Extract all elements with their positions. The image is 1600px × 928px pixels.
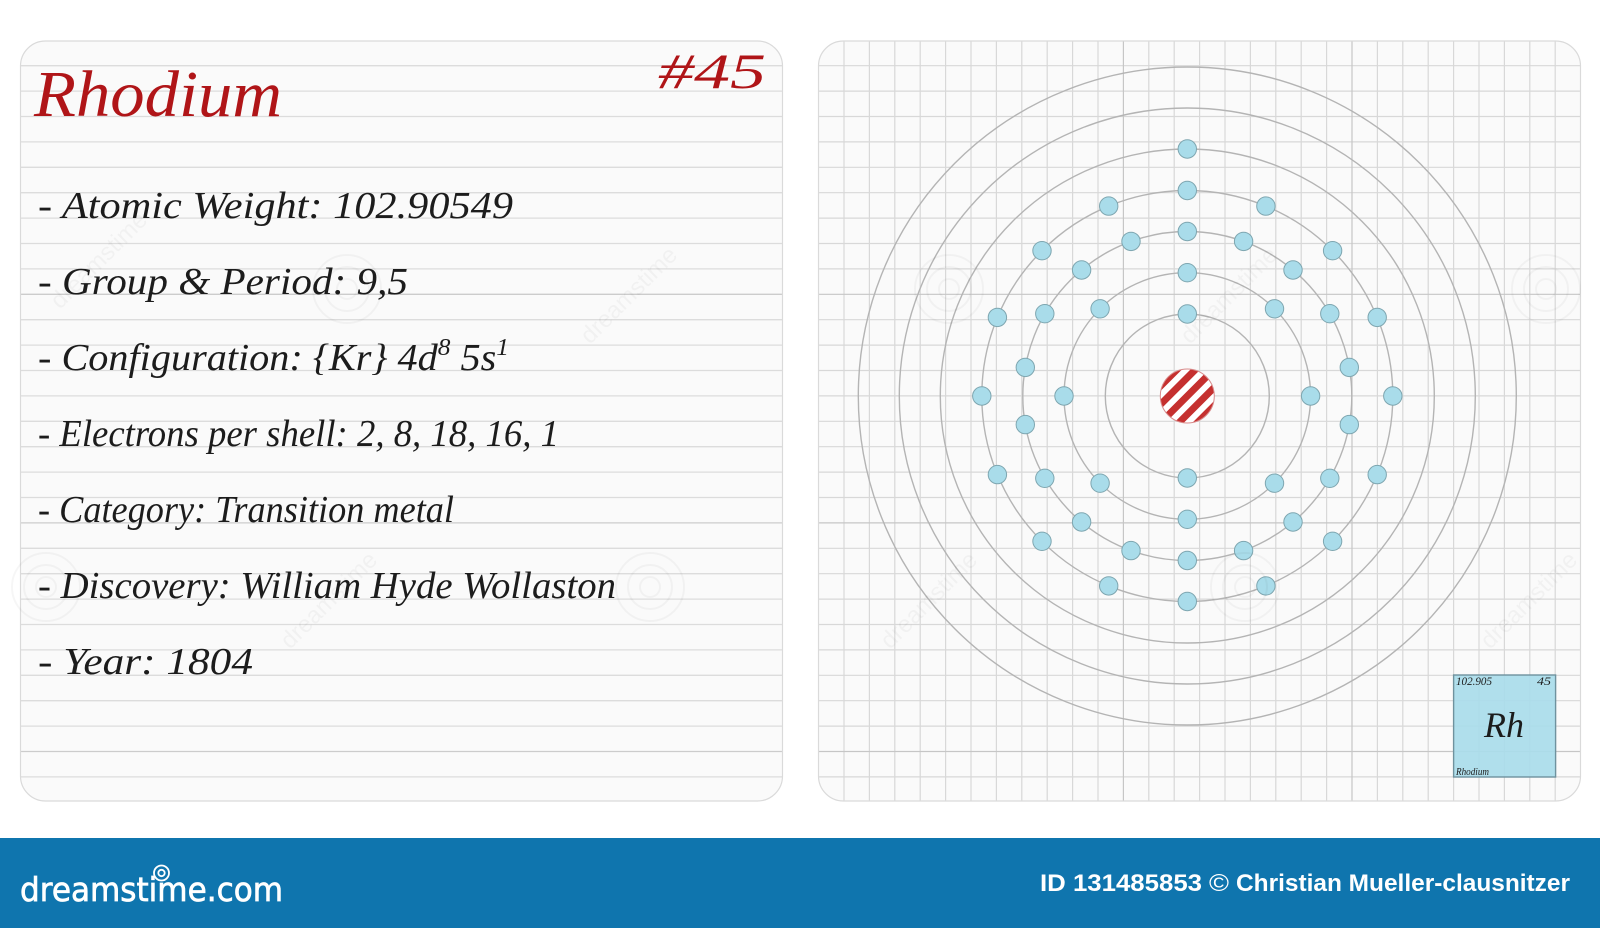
fact: electrons per shell: - Electrons per shell: 2, 8, 18, 16, 1 [38, 413, 559, 455]
image credit: ID 131485853 [1040, 870, 1202, 897]
tile symbol: Rh [1483, 705, 1524, 745]
atom shells [858, 67, 1516, 725]
fact: configuration: 1 [496, 335, 509, 361]
fact: category: - Category: Transition metal [38, 489, 454, 531]
watermarks [12, 206, 1583, 654]
tile name: Rhodium [1455, 766, 1489, 778]
shell 2 electrons [1055, 264, 1320, 528]
fact: year: - Year: 1804 [38, 641, 253, 683]
shell 5 electron [1178, 140, 1196, 158]
watermarks: dreamstime [575, 241, 683, 349]
fact: discovery: - Discovery: William Hyde Wollaston [38, 565, 616, 607]
shell 3 electrons [1016, 222, 1359, 570]
fact: group and period: - Group & Period: 9,5 [38, 261, 408, 303]
logo wordmark: dreamstime.com [20, 870, 283, 909]
shell 1 electrons [1178, 305, 1196, 487]
title: Rhodium [33, 58, 282, 131]
electrons [973, 140, 1402, 611]
nucleus [1160, 369, 1214, 423]
atomic number: #45 [658, 43, 766, 99]
watermarks: dreamstime [875, 546, 983, 654]
fact: configuration: 5s [450, 337, 496, 379]
panel: element facts [20, 41, 783, 801]
icon: logo spiral [154, 866, 169, 880]
fact: configuration: 8 [438, 335, 450, 361]
watermarks: dreamstime [45, 206, 153, 314]
image credit: © [1209, 870, 1229, 897]
fact: atomic weight: - Atomic Weight: 102.90549 [38, 185, 513, 227]
watermarks: dreamstime [275, 546, 383, 654]
panel: atom diagram grid [818, 40, 1581, 802]
tile atomic number: 45 [1537, 674, 1551, 688]
periodic table tile [1454, 674, 1556, 778]
footer banner [0, 838, 1600, 928]
image credit: Christian Mueller-clausnitzer [1236, 870, 1570, 897]
watermarks: dreamstime [1475, 546, 1583, 654]
tile atomic weight: 102.905 [1456, 674, 1492, 688]
shell 4 electrons [973, 181, 1402, 611]
fact: configuration: - Configuration: {Kr} 4d [38, 337, 416, 379]
image credit [1040, 870, 1570, 897]
watermarks: dreamstime [1175, 241, 1283, 349]
